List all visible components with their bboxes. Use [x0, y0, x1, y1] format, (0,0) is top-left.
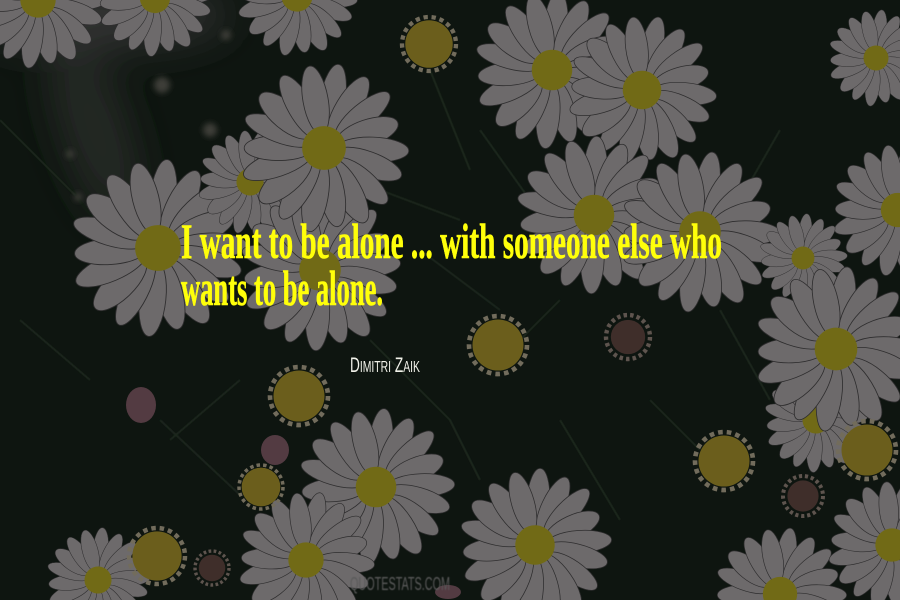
quote line 2: wants to be alone. — [181, 260, 383, 316]
daisy: top left second — [93, 0, 218, 61]
daisy: small ring right — [755, 210, 852, 306]
daisy: behind right — [761, 365, 872, 475]
daisy: top middle — [467, 0, 638, 155]
daisy: top right of middle — [552, 0, 732, 180]
daisy: bottom left of centre — [225, 479, 388, 600]
daisy: behind word who — [608, 140, 793, 325]
daisy: top centre left — [225, 0, 370, 68]
watermark: QUOTESTATS.COM — [350, 574, 450, 594]
bud: pink lower right — [783, 476, 823, 516]
blurred foliage tones — [0, 0, 230, 235]
bud: bottom small — [195, 551, 229, 585]
daisy: right edge — [820, 132, 900, 288]
bud: lower left small — [239, 465, 283, 509]
daisy: behind centre — [186, 118, 314, 246]
blurred buds at left — [66, 30, 231, 201]
bud: bottom left — [129, 528, 185, 584]
stems — [0, 70, 780, 520]
daisy: bottom right edge — [813, 466, 900, 600]
daisy: mid right — [743, 255, 900, 443]
daisy: bottom centre — [453, 463, 618, 600]
bud: lower left — [270, 367, 328, 425]
bud: centre — [469, 316, 527, 374]
quote text — [181, 213, 722, 316]
bud: far right lower — [838, 421, 896, 479]
daisy: top right pink — [822, 4, 900, 112]
pink closed buds — [126, 387, 461, 599]
daisy: top left edge — [0, 0, 116, 78]
daisy: large far left — [60, 150, 257, 346]
daisy: behind word someone — [513, 134, 676, 297]
daisy: lower centre — [290, 400, 463, 574]
bud: pink small centre — [606, 315, 650, 359]
author name: DIMITRI ZAIK — [350, 354, 420, 377]
daisy: bottom right — [704, 518, 857, 600]
daisy: behind quote text — [235, 185, 406, 355]
daisy: bottom left — [41, 523, 155, 600]
daisy: large top centre — [226, 50, 423, 246]
bud: top centre — [402, 17, 456, 71]
bud: right lower — [695, 432, 753, 490]
